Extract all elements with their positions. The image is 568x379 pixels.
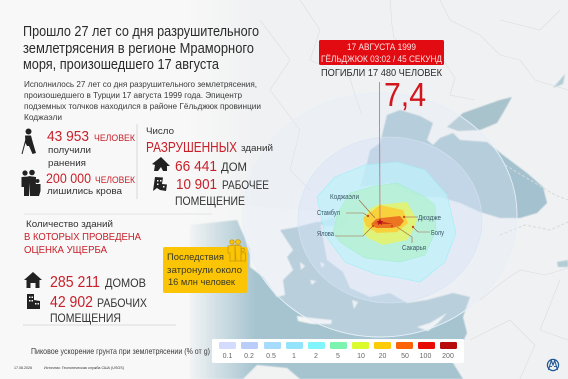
assessed buildings stats: 285 211 [50,274,100,291]
date banner: ГЁЛЬДЖЮК 03:02 / 45 СЕКУНД [321,54,442,65]
icon: office building [27,294,40,309]
city labels and leaders: Сакарья [402,245,426,252]
icon: damaged office [153,177,167,191]
legend: 5 [336,353,340,360]
icon: damaged house [152,157,170,171]
destroyed buildings stats: РАЗРУШЕННЫХ [146,140,237,156]
assessed buildings stats: 42 902 [50,294,93,311]
destroyed buildings stats: РАБОЧЕЕ [222,178,269,192]
epicenter line [378,82,381,222]
icon: epicenter star [376,218,384,225]
legend: 200 [442,353,454,360]
death toll: ПОГИБЛИ 17 480 ЧЕЛОВЕК [321,67,443,79]
casualties stats: 43 953 [47,129,89,145]
date banner: 17 АВГУСТА 1999 [347,42,416,53]
casualties stats: ранения [48,158,86,168]
land: Greece [190,200,320,297]
legend: 0.5 [266,353,276,360]
legend: 0.1 [223,353,232,360]
destroyed buildings stats: зданий [241,143,273,154]
legend title: Пиковое ускорение грунта при землетрясении (% от g) [31,346,210,356]
destroyed buildings stats: 10 901 [176,176,217,193]
city labels and leaders [317,194,444,252]
assessed buildings heading [24,219,141,256]
callout: 16 million affected [163,240,247,293]
destroyed buildings stats: 66 441 [175,158,217,175]
icon: AA logo [547,359,559,371]
shake map: intensity contours [243,93,517,337]
icon: house [24,272,42,288]
casualties stats: получили [48,145,91,155]
title: Прошло 27 лет со дня разрушительного [23,23,259,40]
legend: 10 [357,353,365,360]
callout: 16 million affected: затронули около [167,265,242,275]
legend: 1 [292,353,296,360]
callout: 16 million affected: Последствия [167,252,224,262]
legend: 100 [420,353,431,360]
title [23,23,259,73]
icon: family [22,170,40,196]
legend [212,339,464,363]
intro paragraph: Исполнилось 27 лет со дня разрушительного землетрясения, [24,79,257,89]
icon: family outline [228,240,246,261]
title: моря, произошедшего 17 августа [23,56,220,73]
legend: 20 [379,353,386,360]
callout: 16 million affected: 16 млн человек [168,277,235,287]
intro paragraph: произошедшего в Турции 17 августа 1999 года. Эпицентр [24,90,242,100]
assessed buildings stats: ПОМЕЩЕНИЯ [50,311,121,325]
intro paragraph: подземных толчков находился в районе Гёльджюк провинции [24,101,261,111]
casualties stats: 200 000 [46,171,91,186]
legend: 2 [314,353,318,360]
footer date: 17.08.2026 [14,366,32,370]
intro paragraph: Коджаэли [24,112,62,122]
icon: injured person [22,128,36,154]
casualties stats: ЧЕЛОВЕК [94,133,136,143]
legend: 0.2 [244,353,254,360]
assessed buildings heading: ОЦЕНКА УЩЕРБА [24,244,107,256]
city labels and leaders: Коджаэли [330,194,359,201]
intro paragraph [24,79,261,122]
casualties stats: лишились крова [47,186,122,196]
casualties stats: ЧЕЛОВЕК [95,175,136,185]
panel fade: left white area [0,0,255,379]
casualties stats [22,128,136,196]
destroyed buildings stats: ДОМ [221,160,247,174]
assessed buildings stats: РАБОЧИХ [97,296,147,310]
assessed buildings heading: В КОТОРЫХ ПРОВЕДЕНА [24,231,141,243]
assessed buildings stats: ДОМОВ [105,276,146,290]
city labels and leaders: Дюздже [418,215,441,222]
destroyed buildings stats [146,126,273,208]
assessed buildings heading: Количество зданий [26,219,113,230]
footer source: Источник: Геологическая служба США (USGS) [44,366,125,370]
magnitude: 7,4 [384,76,426,113]
date banner [319,40,444,65]
destroyed buildings stats: Число [146,126,174,136]
assessed buildings stats [24,272,147,325]
legend: 50 [401,353,409,360]
destroyed buildings stats: ПОМЕЩЕНИЕ [175,194,245,208]
title: землетрясения в регионе Мраморного [23,40,254,57]
city labels and leaders: Ялова [317,231,334,238]
city labels and leaders: Стамбул [317,209,340,217]
city labels and leaders: Болу [431,230,444,237]
